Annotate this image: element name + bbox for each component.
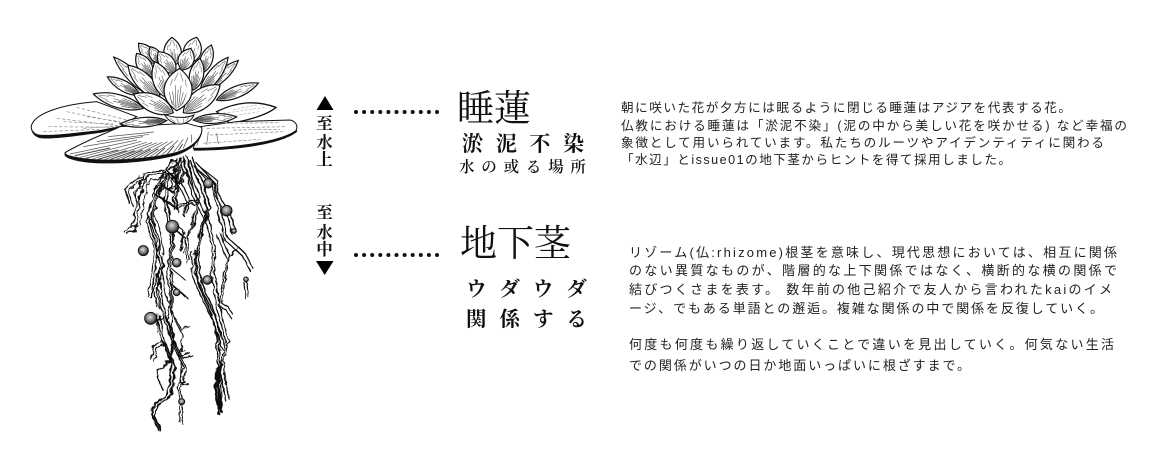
marker: down to under water	[316, 203, 334, 275]
pad: front	[64, 123, 202, 163]
pad: right	[193, 120, 297, 151]
pad: upper right	[217, 103, 276, 123]
marker: up to above water	[316, 96, 334, 169]
dotted leader: upper	[356, 110, 438, 114]
label: 至水中: 中	[316, 240, 333, 259]
text block: rhizome description: ージ、でもある単語との邂逅。複雑な関係の中で関係を反復していく。	[629, 301, 1103, 316]
text block: water lily description: 仏教における睡蓮は「淤泥不染」(泥の中から美しい花を咲かせる) など幸福の	[621, 118, 1127, 133]
roots: left bundle	[124, 158, 197, 430]
label: 至水中: 至	[316, 203, 333, 222]
heading: 地下茎: 地下茎	[460, 223, 571, 265]
label: 至水上	[316, 114, 333, 169]
roots	[124, 157, 253, 432]
label: 至水上: 上	[316, 150, 333, 169]
lily pads	[31, 102, 297, 163]
heading: 睡蓮: 睡蓮	[457, 88, 531, 130]
subheading: 関係する: 関係する	[466, 308, 600, 331]
text block: rhizome description: 結びつくさまを表す。 数年前の他己紹介で友人から言われたkaiのイメ	[629, 282, 1112, 297]
lotus flower petals	[92, 35, 260, 129]
text block: water lily description: 象徴として用いられています。私たちのルーツやアイデンティティに関わる	[621, 135, 1104, 150]
subheading: ウダウダ: ウダウダ	[466, 278, 600, 301]
label: 至水上: 水	[316, 133, 333, 152]
text block: rhizome description: のない異質なものが、階層的な上下関係ではなく、横断的な横の関係で	[629, 263, 1117, 278]
subheading: 淤泥不染: 淤泥不染	[462, 132, 597, 156]
roots and tubers	[124, 157, 253, 432]
text block: rhizome description	[629, 245, 1117, 373]
icon: down triangle	[316, 261, 334, 275]
text block: rhizome description: リゾーム(仏:rhizome)根茎を意味し、現代思想においては、相互に関係	[629, 245, 1117, 260]
text block: rhizome description: 何度も何度も繰り返していくことで違いを見出していく。何気ない生活	[629, 337, 1114, 352]
subheading: 水の或る場所: 水の或る場所	[459, 158, 593, 176]
label: 至水中	[316, 203, 333, 259]
roots: right bundle	[182, 157, 253, 412]
tubers	[138, 179, 248, 405]
text block: water lily description: 「水辺」とissue01の地下茎からヒントを得て採用しました。	[621, 152, 1011, 167]
pad: left	[31, 102, 137, 139]
label: 至水中: 水	[316, 223, 333, 242]
icon: up triangle	[316, 96, 334, 110]
label: 至水上: 至	[316, 114, 333, 133]
dotted leader: lower	[356, 253, 438, 257]
illustration: water lily with roots	[31, 35, 297, 432]
roots: dense duplicates	[127, 159, 250, 432]
text block: water lily description: 朝に咲いた花が夕方には眠るように閉じる睡蓮はアジアを代表する花。	[621, 100, 1071, 115]
text block: rhizome description: での関係がいつの日か地面いっぱいに根ざすまで。	[629, 358, 970, 373]
text block: water lily description	[621, 100, 1127, 167]
